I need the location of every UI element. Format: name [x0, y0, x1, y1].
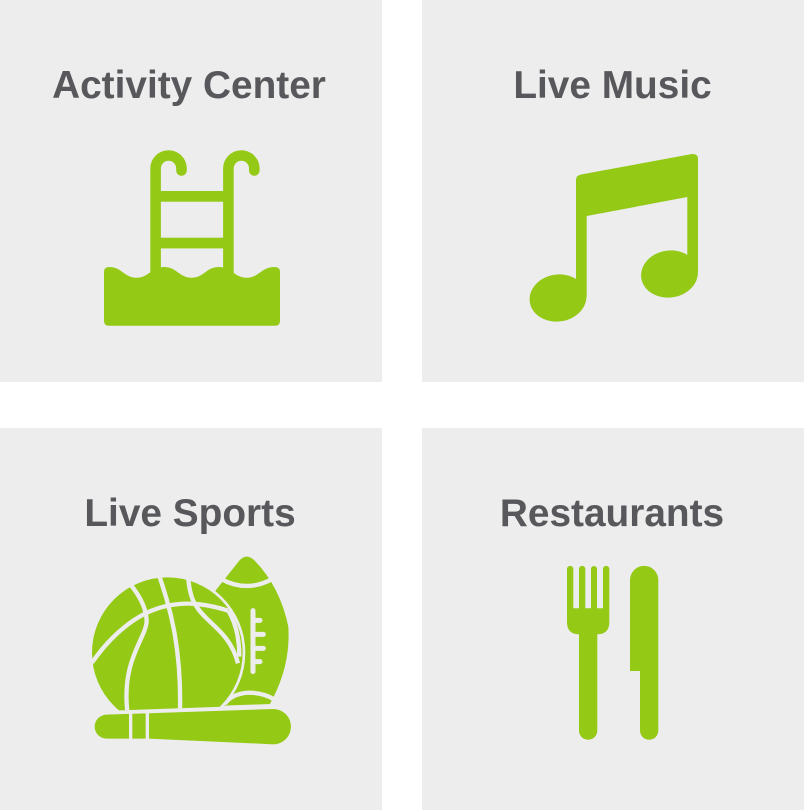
football [203, 557, 289, 706]
icon: sports balls and bat [89, 557, 291, 744]
panel: live music [422, 0, 804, 382]
fork [567, 566, 609, 740]
heading: activity center: Activity Center [52, 64, 326, 107]
basketball [92, 577, 246, 710]
panel: restaurants [422, 428, 804, 810]
icon: music notes [527, 154, 701, 325]
icon: pool ladder [104, 156, 280, 326]
heading: restaurants: Restaurants [500, 492, 724, 535]
knife [630, 566, 658, 740]
heading: live music: Live Music [513, 64, 712, 107]
panel: live sports [0, 428, 382, 810]
heading: live sports: Live Sports [84, 492, 296, 535]
icon: fork and knife [567, 566, 658, 740]
panel: activity center [0, 0, 382, 382]
baseball bat [95, 709, 291, 744]
